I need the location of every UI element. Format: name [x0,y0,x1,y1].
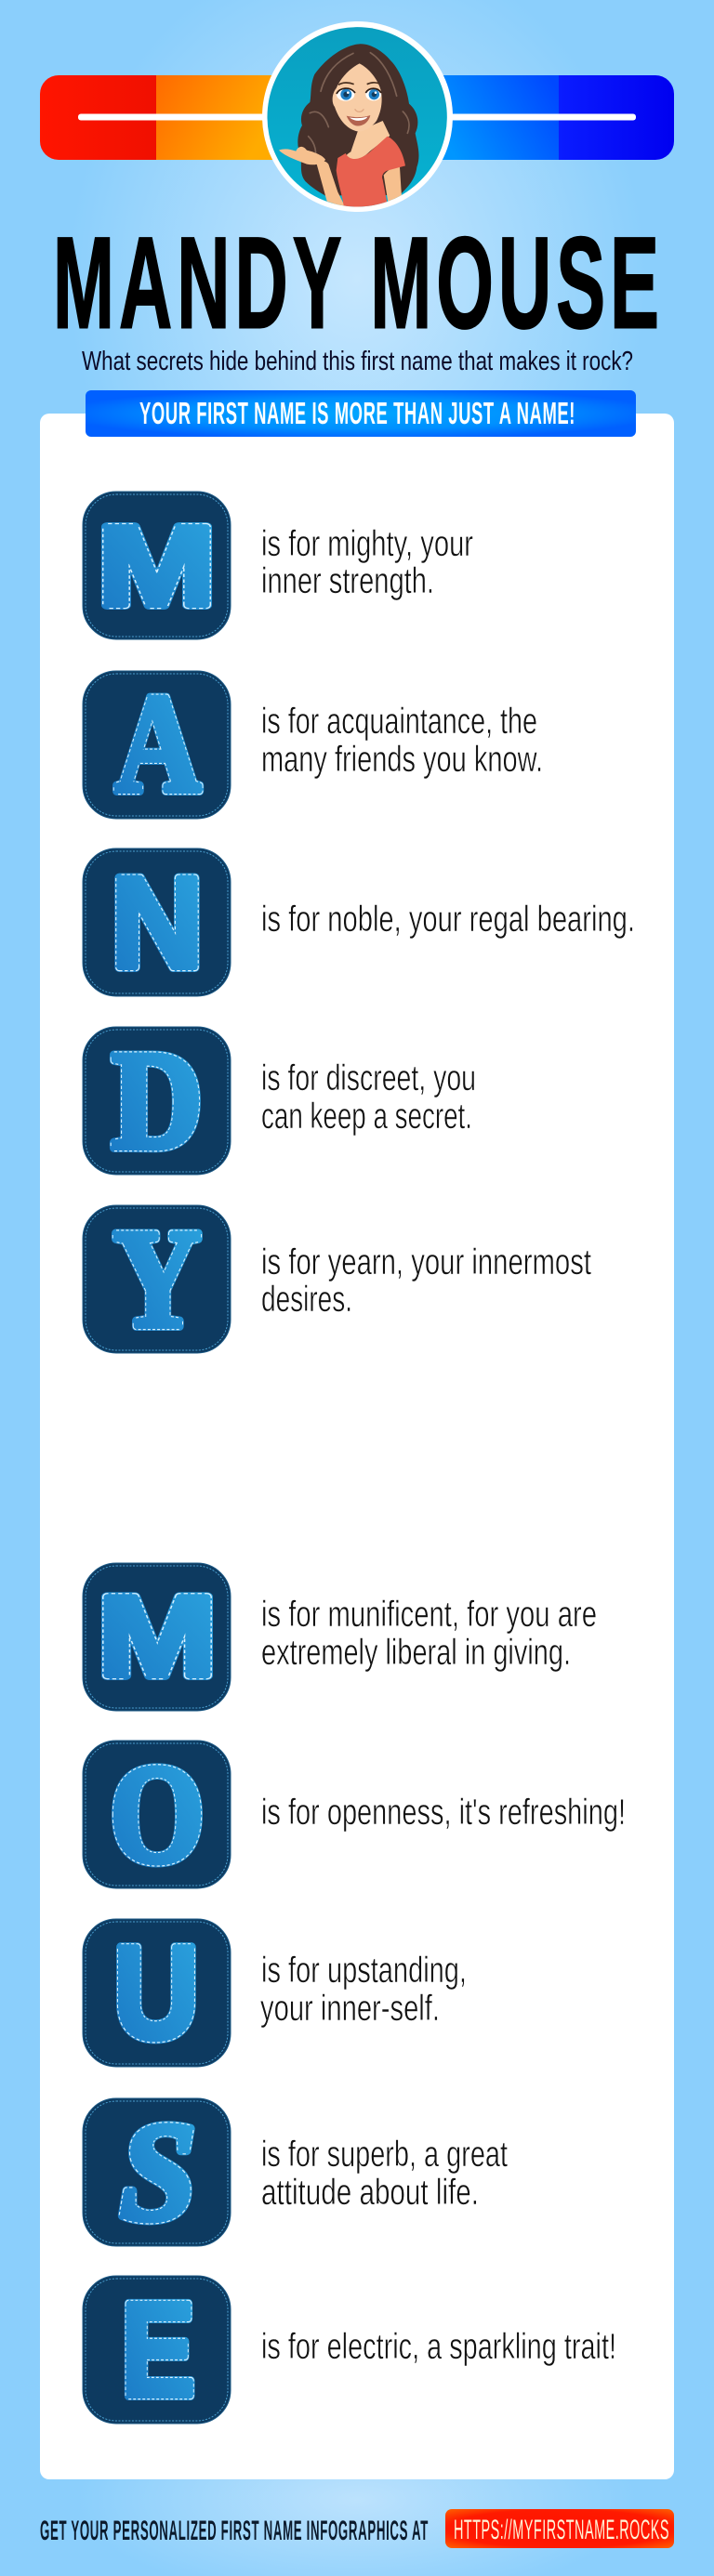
text: discreet [261,1058,476,1137]
hair highlights [309,53,409,164]
portrait badge [262,21,453,212]
neck [346,121,390,160]
text: discreet: can keep a secret. [261,1097,472,1137]
row: E electric [83,2275,616,2425]
icon: letter A: A [115,665,201,821]
text: acquaintance: is for acquaintance, the [261,702,537,742]
icon: letter N [83,848,231,996]
icon: letter M: M [98,1573,217,1701]
text: upstanding [260,1951,467,2029]
icon: letter D: D [112,1022,203,1178]
icon: letter Y [83,1201,231,1357]
icon: letter E: E [121,2275,195,2425]
icon: letter U: U [113,1919,199,2067]
text: acquaintance [261,702,543,780]
icon: letter M: M [98,1573,217,1701]
row: M munificent [83,1563,597,1711]
eyes [337,83,381,101]
icon: letter U [83,1919,231,2067]
icon: letter Y: Y [113,1201,201,1357]
icon: letter U: U [113,1919,199,2067]
text: discreet: is for discreet, you [261,1058,476,1098]
row: N noble [83,848,635,996]
tagline banner [86,390,636,437]
icon: letter M [83,492,231,639]
text: mighty [261,524,473,601]
icon: letter E: E [121,2275,195,2425]
icon: letter D: D [112,1022,203,1178]
text: superb: is for superb, a great [261,2135,508,2175]
icon: letter N: N [111,849,204,995]
icon: letter S [83,2094,231,2250]
left arm [317,162,346,207]
face [333,63,382,131]
text: mighty: inner strength. [261,561,434,601]
text: acquaintance: many friends you know. [261,740,543,780]
icon: letter D: D [112,1022,203,1178]
row: O openness [83,1736,626,1892]
row: S superb [83,2094,508,2250]
icon: letter M: M [98,503,216,629]
text: upstanding: your inner-self. [260,1989,440,2029]
icon: letter M: M [98,1573,217,1701]
icon: letter E: E [121,2275,195,2425]
row: A acquaintance [83,665,543,821]
text: munificent: is for munificent, for you are [261,1595,597,1635]
shirt [337,137,405,207]
white content panel [40,414,674,2479]
icon: letter O: O [110,1736,205,1892]
icon: letter A [83,665,231,821]
text: munificent: extremely liberal in giving. [261,1633,571,1673]
icon: letter S: S [120,2094,196,2250]
hand [279,147,325,164]
icon: letter E [83,2275,231,2425]
text: yearn: desires. [261,1280,352,1320]
text: superb: attitude about life. [261,2173,479,2213]
text: munificent [261,1595,597,1673]
icon: letter M [83,1563,231,1711]
text: upstanding: is for upstanding, [261,1951,467,1991]
icon: letter A: A [115,665,201,821]
row: D discreet [83,1022,476,1178]
row: Y yearn [83,1201,591,1357]
icon: letter S: S [120,2094,196,2250]
icon: letter M: M [98,503,216,629]
icon: letter U: U [113,1919,199,2067]
icon: letter S: S [120,2094,196,2250]
icon: letter N: N [111,849,204,995]
icon: letter M: M [98,503,216,629]
text: yearn: is for yearn, your innermost [261,1242,591,1282]
hair [298,44,418,197]
icon: letter N: N [111,849,204,995]
header colour bar [40,75,674,160]
text: superb [261,2135,508,2213]
text: mighty: is for mighty, your [261,524,473,564]
mouth [347,115,370,125]
text: yearn [261,1242,591,1320]
nose [355,109,364,112]
icon: letter A: A [115,665,201,821]
row: M mighty [83,492,473,639]
icon: letter Y: Y [113,1201,201,1357]
icon: letter O: O [110,1736,205,1892]
icon: letter Y: Y [113,1201,201,1357]
footer url button [445,2509,674,2548]
icon: letter O: O [110,1736,205,1892]
icon: letter D [83,1022,231,1178]
row: U upstanding [83,1919,467,2067]
right arm [383,167,402,202]
